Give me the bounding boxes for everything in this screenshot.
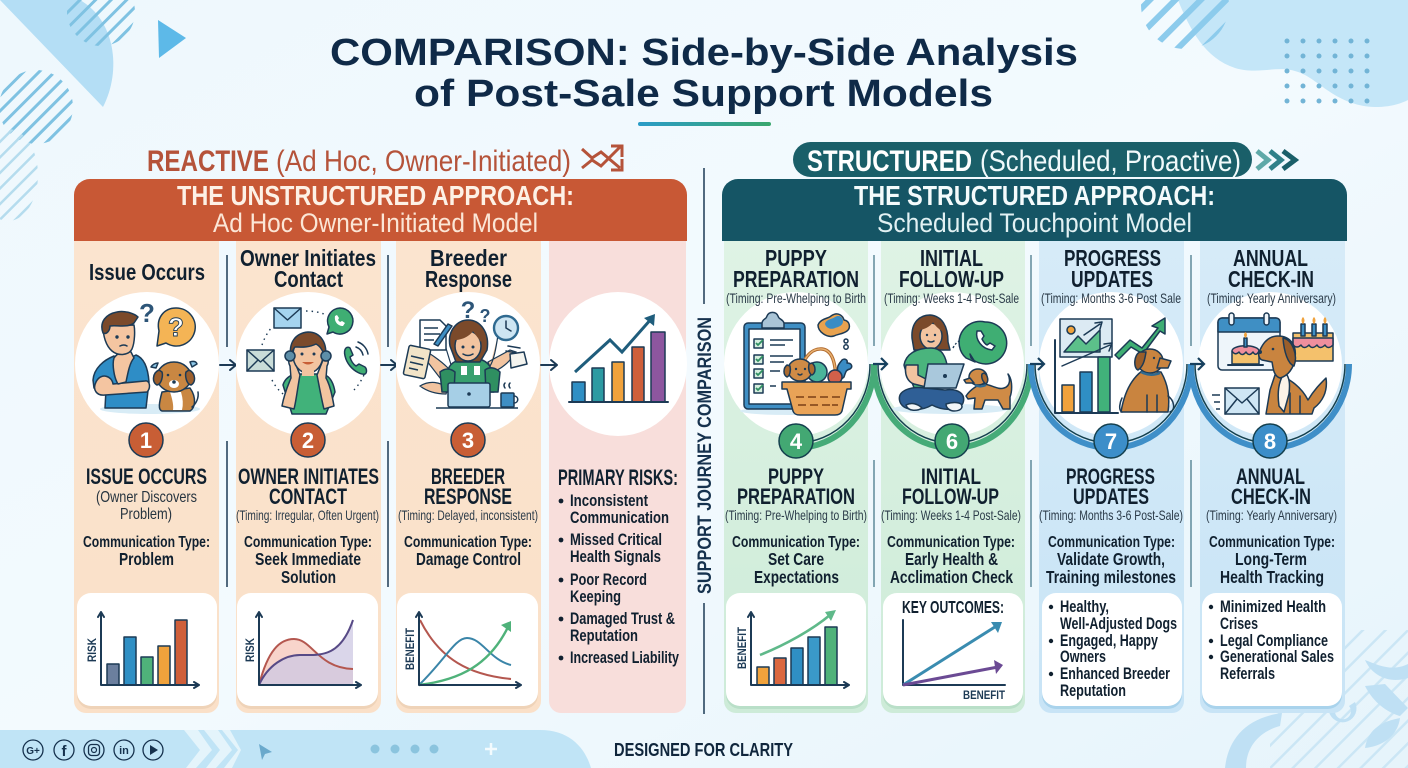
column: puppy preparation: Communication Type: bbox=[732, 534, 860, 551]
column: breeder response bbox=[396, 241, 541, 713]
column: initial follow-up: INITIAL bbox=[920, 245, 983, 271]
arrow: step 3 to risks bbox=[541, 360, 557, 370]
column: puppy preparation: Expectations bbox=[754, 567, 839, 587]
column: puppy preparation: (Timing: Pre-Whelping to Birth) bbox=[725, 507, 867, 523]
icon: clipboard and puppy basket bbox=[740, 312, 852, 415]
column: primary risks bbox=[549, 241, 687, 713]
list: primary risks: Missed Critical bbox=[570, 530, 662, 549]
badge: 3: 3 bbox=[462, 428, 474, 453]
column: annual check-in: Health Tracking bbox=[1220, 567, 1324, 587]
card: long-term benefits list: Minimized Health bbox=[1220, 597, 1326, 616]
column: progress updates bbox=[1039, 241, 1184, 713]
footer band bbox=[0, 730, 591, 768]
panel header: structured: Scheduled Touchpoint Model bbox=[877, 208, 1192, 238]
column: issue occurs: ISSUE OCCURS bbox=[86, 464, 207, 489]
social icons: in bbox=[119, 745, 129, 757]
column: progress updates: UPDATES bbox=[1071, 266, 1153, 292]
icon: owner on the phone bbox=[247, 308, 368, 414]
card: long-term benefits list bbox=[1202, 593, 1342, 709]
column: puppy preparation: Set Care bbox=[768, 549, 824, 569]
icon: overwhelmed breeder: ? bbox=[480, 306, 490, 326]
column: breeder response: Response bbox=[425, 266, 512, 292]
list: primary risks: Damaged Trust & bbox=[570, 609, 675, 628]
social icons: f bbox=[62, 743, 68, 760]
column: initial follow-up: INITIAL bbox=[921, 464, 981, 489]
column: issue occurs: Problem) bbox=[120, 506, 172, 523]
column: breeder response: (Timing: Delayed, inconsistent) bbox=[398, 507, 538, 523]
icon: worried owner and puppy: ? bbox=[139, 298, 155, 328]
chart: risk bars bbox=[77, 593, 217, 709]
badge: 6: 6 bbox=[946, 429, 958, 454]
column: annual check-in: ANNUAL bbox=[1233, 245, 1308, 271]
column: primary risks: PRIMARY RISKS: bbox=[558, 465, 678, 490]
column: initial follow-up: Communication Type: bbox=[887, 534, 1015, 551]
footer tagline: DESIGNED FOR CLARITY bbox=[614, 740, 793, 760]
chart: benefit curves bbox=[397, 593, 538, 709]
column: breeder response: Communication Type: bbox=[404, 534, 532, 551]
column: issue occurs: Communication Type: bbox=[83, 534, 210, 551]
title bbox=[330, 32, 1078, 115]
list: primary risks: Health Signals bbox=[570, 547, 661, 566]
column: annual check-in: (Timing: Yearly Anniversary) bbox=[1206, 507, 1337, 523]
card: outcomes list: Healthy, bbox=[1060, 597, 1109, 616]
column: issue occurs: (Owner Discovers bbox=[96, 489, 197, 506]
badge: 7: 7 bbox=[1105, 429, 1117, 454]
badge: 8 bbox=[1253, 424, 1287, 458]
column: puppy preparation bbox=[724, 241, 868, 713]
card: outcomes list: Well-Adjusted Dogs bbox=[1060, 614, 1177, 633]
list: primary risks: Communication bbox=[570, 508, 669, 527]
subheading: reactive: REACTIVE bbox=[147, 145, 269, 178]
card: outcomes list: Reputation bbox=[1060, 681, 1126, 700]
column: owner initiates contact: Seek Immediate bbox=[255, 549, 361, 569]
column: puppy preparation: PUPPY bbox=[768, 464, 824, 489]
panel header: structured: THE STRUCTURED APPROACH: bbox=[854, 180, 1215, 211]
panel header: unstructured: Ad Hoc Owner-Initiated Model bbox=[213, 208, 538, 238]
card: outcomes list: Owners bbox=[1060, 647, 1106, 666]
badge: 8: 8 bbox=[1264, 429, 1276, 454]
list: primary risks: Reputation bbox=[570, 626, 638, 645]
column: annual check-in: (Timing: Yearly Anniversary) bbox=[1207, 290, 1336, 306]
badge: 6 bbox=[935, 424, 969, 458]
card: outcomes list: Enhanced Breeder bbox=[1060, 664, 1170, 683]
icon: owner with laptop and dog bbox=[892, 315, 1012, 414]
column: annual check-in: Long-Term bbox=[1235, 549, 1307, 569]
column: breeder response: Breeder bbox=[430, 245, 507, 271]
connector arcs: touchpoint timeline bbox=[796, 255, 1349, 587]
list: primary risks: Poor Record bbox=[570, 570, 647, 589]
column: owner initiates contact: (Timing: Irregular, Often Urgent) bbox=[236, 507, 379, 523]
badge: 7 bbox=[1094, 424, 1128, 458]
card: long-term benefits list: Legal Compliance bbox=[1220, 631, 1328, 650]
subheading: structured pill bbox=[793, 142, 1252, 178]
column: issue occurs: Issue Occurs bbox=[89, 259, 205, 285]
column: owner initiates contact: Contact bbox=[274, 266, 343, 292]
chart: key outcomes: BENEFIT bbox=[963, 688, 1006, 702]
card: long-term benefits list: Crises bbox=[1220, 614, 1258, 633]
social icons bbox=[23, 740, 163, 760]
column: progress updates: Training milestones bbox=[1046, 567, 1176, 587]
column: breeder response: RESPONSE bbox=[424, 484, 512, 509]
column: progress updates: PROGRESS bbox=[1064, 245, 1161, 271]
column: issue occurs bbox=[74, 241, 219, 713]
icon: calendar, cakes and dog bbox=[1212, 313, 1333, 414]
column: progress updates: Communication Type: bbox=[1048, 534, 1175, 551]
badge: 4: 4 bbox=[790, 429, 803, 454]
card: outcomes list bbox=[1042, 593, 1182, 709]
column: puppy preparation: PUPPY bbox=[765, 245, 827, 271]
column: initial follow-up: FOLLOW-UP bbox=[902, 484, 999, 509]
icon: worried owner and puppy bbox=[93, 298, 200, 414]
column: owner initiates contact: Communication Type: bbox=[244, 534, 372, 551]
title underline bbox=[638, 122, 771, 126]
icon: progress chart and dog bbox=[1055, 318, 1174, 413]
list: primary risks: Increased Liability bbox=[570, 648, 679, 667]
column: initial follow-up: (Timing: Weeks 1-4 Post-Sale bbox=[884, 290, 1019, 306]
card: long-term benefits list: Generational Sales bbox=[1220, 647, 1334, 666]
column: initial follow-up: (Timing: Weeks 1-4 Post-Sale) bbox=[881, 507, 1021, 523]
title: COMPARISON: Side-by-Side Analysis bbox=[330, 32, 1078, 74]
icon: crossing arrows bbox=[582, 146, 622, 170]
chart: benefit curves: BENEFIT bbox=[403, 627, 417, 670]
column: annual check-in: ANNUAL bbox=[1236, 464, 1305, 489]
badge: 4 bbox=[779, 424, 813, 458]
column: annual check-in bbox=[1198, 241, 1345, 713]
column: progress updates: PROGRESS bbox=[1066, 464, 1155, 489]
column: annual check-in: CHECK-IN bbox=[1231, 484, 1311, 509]
panel header: unstructured bbox=[74, 179, 687, 241]
card: outcomes list: Engaged, Happy bbox=[1060, 631, 1158, 650]
column: initial follow-up bbox=[880, 241, 1025, 713]
decoration: top right shapes bbox=[1141, 0, 1408, 107]
column: owner initiates contact: CONTACT bbox=[269, 484, 347, 509]
panel header: unstructured: THE UNSTRUCTURED APPROACH: bbox=[177, 180, 574, 211]
social icons: G+ bbox=[26, 746, 40, 757]
column: progress updates: Validate Growth, bbox=[1057, 549, 1165, 569]
title: of Post-Sale Support Models bbox=[414, 73, 993, 115]
subheading: structured pill: (Scheduled, Proactive) bbox=[980, 145, 1241, 178]
vertical label: SUPPORT JOURNEY COMPARISON bbox=[695, 317, 716, 594]
subheading: structured pill: STRUCTURED bbox=[807, 145, 972, 178]
icon: overwhelmed breeder: ? bbox=[461, 297, 475, 324]
panel: unstructured approach bbox=[74, 179, 687, 713]
badge: 3 bbox=[451, 423, 485, 457]
panel header: structured bbox=[722, 179, 1347, 241]
column: owner initiates contact: Owner Initiates bbox=[240, 245, 376, 271]
center divider bbox=[703, 168, 705, 714]
arrow: step 2 to 3 bbox=[381, 255, 397, 587]
subheading: reactive bbox=[147, 145, 571, 178]
arrow: step 1 to 2 bbox=[220, 255, 236, 587]
decoration: bottom right shapes bbox=[1225, 630, 1408, 768]
column: initial follow-up: Early Health & bbox=[905, 549, 998, 569]
column: annual check-in: Communication Type: bbox=[1209, 534, 1335, 551]
decoration: top left shapes bbox=[0, 0, 186, 221]
column: puppy preparation: (Timing: Pre-Whelping to Birth bbox=[726, 290, 866, 306]
column: owner initiates contact: Solution bbox=[281, 567, 336, 587]
column: progress updates: UPDATES bbox=[1073, 484, 1149, 509]
chart: risk bars: RISK bbox=[85, 638, 99, 662]
chart: risk curves: RISK bbox=[243, 638, 257, 662]
badge: 1: 1 bbox=[140, 428, 152, 453]
icon: chevrons bbox=[1257, 151, 1295, 169]
list: primary risks: Inconsistent bbox=[570, 491, 648, 510]
subheading: reactive: (Ad Hoc, Owner-Initiated) bbox=[276, 145, 571, 178]
chart: benefit bars: BENEFIT bbox=[735, 626, 749, 669]
column: breeder response: BREEDER bbox=[431, 464, 505, 489]
chart: key outcomes bbox=[883, 593, 1023, 709]
icon: overwhelmed breeder bbox=[403, 297, 527, 408]
badge: 2 bbox=[291, 423, 325, 457]
column: annual check-in: CHECK-IN bbox=[1228, 266, 1314, 292]
column: breeder response: Damage Control bbox=[416, 549, 521, 569]
panel: structured approach bbox=[722, 179, 1347, 713]
column: initial follow-up: FOLLOW-UP bbox=[899, 266, 1004, 292]
badge: 2: 2 bbox=[302, 428, 314, 453]
column: owner initiates contact: OWNER INITIATES bbox=[238, 464, 379, 489]
chart: key outcomes: KEY OUTCOMES: bbox=[902, 597, 1004, 617]
icon: worried owner and puppy: ? bbox=[168, 312, 184, 342]
list: primary risks bbox=[559, 491, 679, 667]
column: puppy preparation: PREPARATION bbox=[737, 484, 855, 509]
chart: benefit bars bbox=[726, 593, 866, 709]
badge: 1 bbox=[129, 423, 163, 457]
column: progress updates: (Timing: Months 3-6 Post-Sale) bbox=[1039, 507, 1183, 523]
chart: risk curves bbox=[237, 593, 378, 709]
column: puppy preparation: PREPARATION bbox=[733, 266, 859, 292]
icon: rising bar chart bbox=[569, 314, 668, 402]
card: long-term benefits list: Referrals bbox=[1220, 664, 1275, 683]
column: owner initiates contact bbox=[236, 241, 381, 713]
column: progress updates: (Timing: Months 3-6 Post Sale bbox=[1041, 290, 1181, 306]
list: primary risks: Keeping bbox=[570, 587, 621, 606]
column: issue occurs: Problem bbox=[119, 549, 174, 569]
column: initial follow-up: Acclimation Check bbox=[890, 567, 1013, 587]
